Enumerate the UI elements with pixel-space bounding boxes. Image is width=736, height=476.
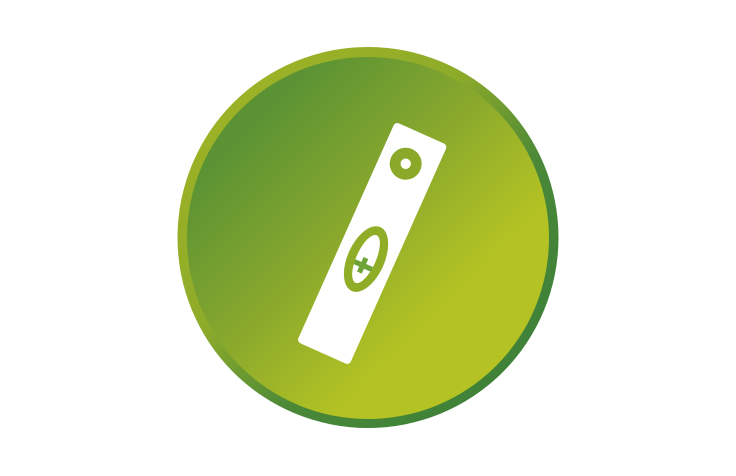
strip body [297,122,448,365]
icon: test strip [297,122,448,365]
inner disc [187,57,549,419]
icon: rapid test badge [178,47,558,428]
result window [335,220,397,299]
positive plus mark [351,254,375,277]
sample well [385,143,427,185]
outer ring [178,47,558,428]
